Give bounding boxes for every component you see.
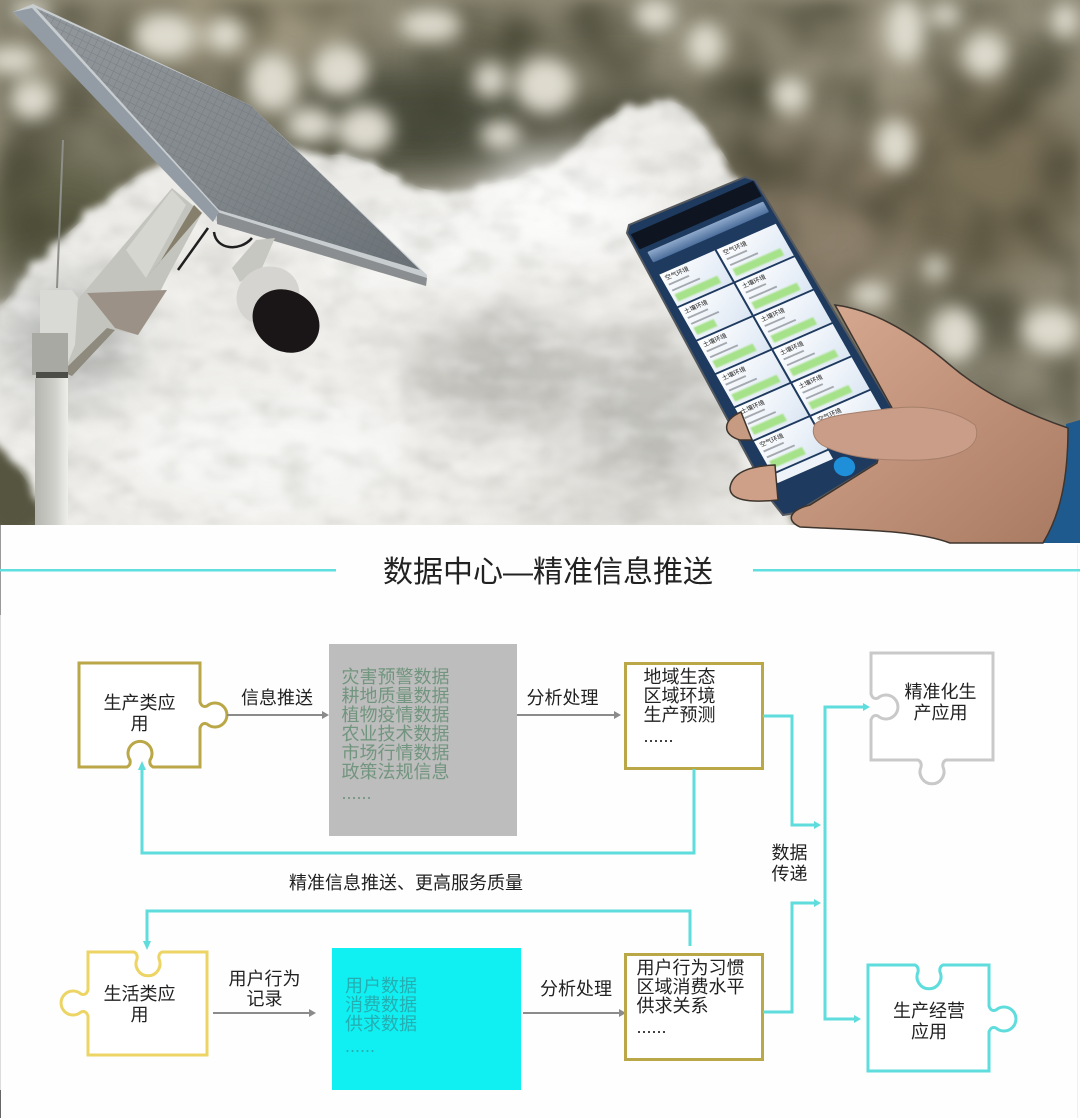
label: 分析处理 lower: 分析处理 <box>540 979 612 999</box>
panel: 生产数据: 农业技术数据 <box>342 724 450 744</box>
panel: 生产数据 <box>329 644 517 836</box>
panel: 生产数据: 灾害预警数据 <box>342 667 450 687</box>
panel: 生产数据: 政策法规信息 <box>342 762 450 782</box>
arrow: upper data to collector <box>763 716 821 829</box>
box: 用户行为分析: 供求关系 <box>636 996 708 1016</box>
puzzle: 精准化生产应用 <box>871 653 993 784</box>
puzzle: 生产经营应用: 生产经营 <box>893 1001 965 1021</box>
puzzle: 精准化生产应用: 产应用 <box>914 703 968 723</box>
box: 用户行为分析 <box>626 954 762 1060</box>
box: 用户行为分析: ...... <box>636 1017 667 1037</box>
phone data cards: 空气环境 <box>816 406 843 424</box>
phone data cards: 土壤环境 <box>739 398 766 416</box>
panel: 生产数据: 植物疫情数据 <box>342 705 450 725</box>
icon: sleeve <box>1042 420 1080 543</box>
icon: upper finger <box>727 412 752 440</box>
icon: thumb <box>813 407 977 460</box>
phone data cards: 土壤环境 <box>720 364 747 382</box>
panel: 用户数据: ...... <box>345 1036 375 1056</box>
label: 分析处理 upper: 分析处理 <box>526 688 598 708</box>
panel: 生产数据: ...... <box>342 783 372 803</box>
puzzle: 生活类应用: 生活类应 <box>104 984 176 1004</box>
panel: 生产数据: 耕地质量数据 <box>342 686 450 706</box>
photo: cotton field background <box>0 0 1080 540</box>
title: 数据中心—精准信息推送 <box>383 556 713 589</box>
arrow: collector to applications <box>825 703 870 1023</box>
box: 地域生态分析: 地域生态 <box>644 667 716 687</box>
phone data cards: 土壤环境 <box>682 298 709 315</box>
phone data cards: 土壤环境 <box>759 306 786 323</box>
phone nav button <box>830 454 859 479</box>
box: 用户行为分析: 用户行为习惯 <box>636 958 744 978</box>
puzzle: 精准化生产应用: 精准化生 <box>904 682 976 702</box>
photo: hand holding phone <box>727 305 1080 543</box>
title rule right <box>753 569 1080 572</box>
label: 数据传递: 传递 <box>772 864 808 884</box>
label: 数据传递 <box>772 843 808 884</box>
box: 用户行为分析: 区域消费水平 <box>636 977 744 997</box>
arrow: feedback to 生活类应用 <box>143 911 690 950</box>
phone data cards: 土壤环境 <box>797 372 824 390</box>
phone status bar <box>631 181 762 250</box>
phone data cards: 土壤环境 <box>778 339 805 357</box>
label: 信息推送: 信息推送 <box>241 688 313 708</box>
puzzle: 生活类应用: 用 <box>130 1005 148 1025</box>
icon: cable <box>178 228 252 270</box>
phone data cards: 土壤环境 <box>701 331 728 349</box>
icon: pole <box>35 378 68 526</box>
panel: 用户数据: 消费数据 <box>345 995 417 1015</box>
puzzle: 生产类应用: 生产类应 <box>104 693 176 713</box>
photo: white cotton mass <box>0 100 800 540</box>
box: 地域生态分析: 区域环境 <box>644 686 716 706</box>
puzzle: 生产经营应用 <box>868 965 1016 1071</box>
icon: antenna <box>57 140 63 288</box>
label: 用户行为记录: 记录 <box>246 989 282 1009</box>
phone header bar <box>647 201 769 263</box>
box: 地域生态分析: 生产预测 <box>644 705 716 725</box>
icon: lower finger <box>730 465 778 501</box>
panel: 用户数据: 用户数据 <box>345 976 417 996</box>
box: 地域生态分析 <box>626 664 762 768</box>
phone data cards: 空气环境 <box>663 264 691 282</box>
photo: smartphone <box>627 177 906 515</box>
panel: 生产数据: 市场行情数据 <box>342 743 450 763</box>
title rule left <box>0 569 336 572</box>
arrow: 分析处理 lower <box>523 1009 626 1017</box>
arrow: feedback to 生产类应用 <box>138 761 694 853</box>
icon: solar panel <box>13 4 427 286</box>
icon: mounting arm <box>32 188 202 378</box>
label: 用户行为记录 <box>228 969 300 1009</box>
icon: palm <box>791 305 1068 543</box>
label: 数据传递: 数据 <box>772 843 808 863</box>
arrow: lower data to collector <box>763 899 821 1012</box>
photo: solar camera pole <box>13 4 427 526</box>
arrow: 信息推送 <box>227 711 329 719</box>
arrow: 用户行为记录 <box>213 1009 316 1017</box>
lower panel background <box>0 525 1080 1118</box>
icon: dome camera <box>232 238 320 353</box>
panel: 用户数据 <box>332 948 521 1090</box>
phone data cards: 土壤环境 <box>740 272 767 290</box>
puzzle: 生产类应用 <box>79 663 227 767</box>
phone data cards: 空气环境 <box>758 431 785 449</box>
puzzle: 生活类应用 <box>61 952 207 1055</box>
panel: 用户数据: 供求数据 <box>345 1014 417 1034</box>
phone data cards: 空气环境 <box>721 239 748 257</box>
box: 地域生态分析: ...... <box>644 726 674 746</box>
dark lower-left corner <box>0 446 35 525</box>
label: 精准信息推送、更高服务质量: 精准信息推送、更高服务质量 <box>289 873 523 893</box>
phone data cards <box>659 224 894 483</box>
label: 用户行为记录: 用户行为 <box>228 969 300 989</box>
arrow: 分析处理 upper <box>517 711 621 719</box>
puzzle: 生产类应用: 用 <box>130 714 148 734</box>
puzzle: 生产经营应用: 应用 <box>911 1022 947 1042</box>
